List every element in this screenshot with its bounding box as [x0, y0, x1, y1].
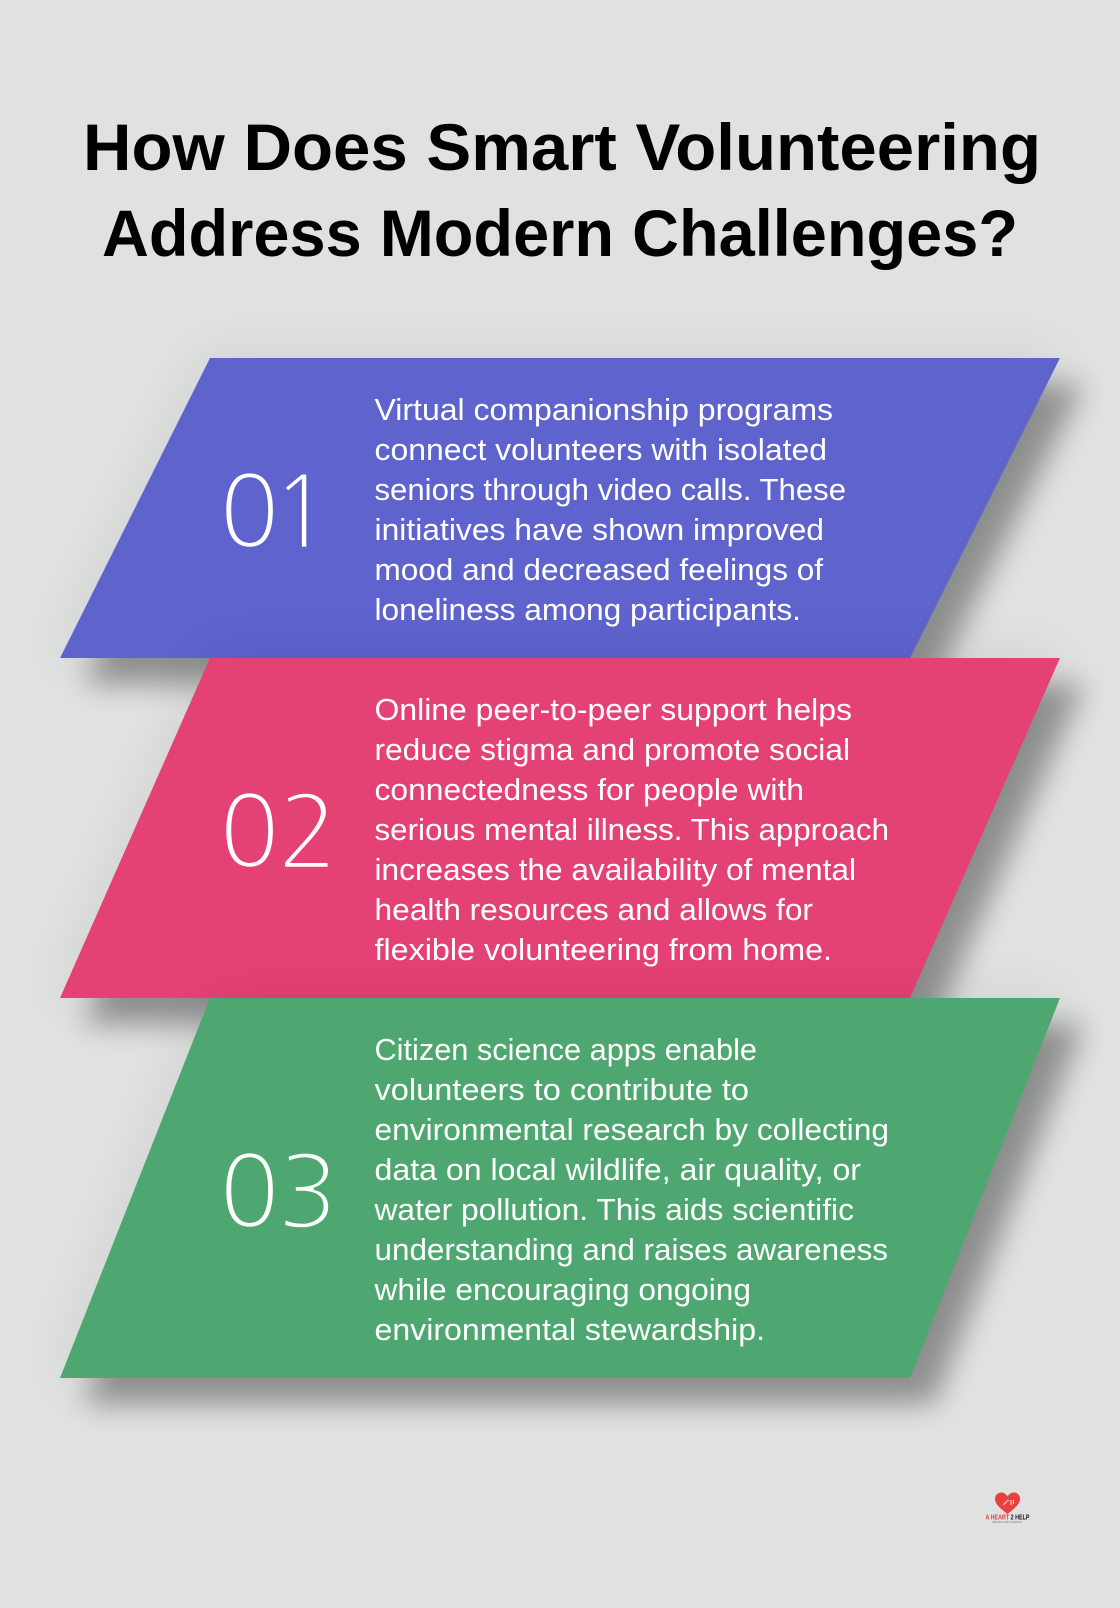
text: step 01 description	[374, 392, 846, 627]
text: step 03 description: volunteers to contribute to	[374, 1072, 749, 1107]
text: step 02 description	[374, 692, 889, 967]
text: step 01 description: initiatives have shown improved	[374, 512, 824, 547]
text: step 02 description: flexible volunteering from home.	[374, 932, 832, 967]
text: step 01 description: mood and decreased feelings of	[374, 552, 823, 587]
text: step 03 description	[373, 1032, 889, 1347]
text: step 03 description: while encouraging ongoing	[373, 1272, 751, 1307]
number 01: 01	[219, 462, 331, 562]
text: step 02 description: increases the availability of mental	[374, 852, 856, 887]
text: step 02 description: connectedness for people with	[374, 772, 804, 807]
text: step 02 description: Online peer-to-peer support helps	[374, 692, 852, 727]
number 02: 02	[219, 782, 338, 882]
number 03: 03	[219, 1142, 338, 1242]
panel: step 01	[60, 358, 1060, 658]
text: step 01 description: connect volunteers with isolated	[374, 432, 827, 467]
text: step 02 description: reduce stigma and promote social	[374, 732, 850, 767]
icon: heart with hands	[995, 1492, 1020, 1514]
text: step 01 description: loneliness among participants.	[374, 592, 801, 627]
text: step 03 description: environmental stewardship.	[374, 1312, 765, 1347]
blue parallelogram	[60, 358, 1060, 658]
text: step 03 description: water pollution. This aids scientific	[373, 1192, 854, 1227]
logo tagline: HELPING AND SHARING	[992, 1520, 1022, 1524]
logo: A Heart 2 Help	[986, 1492, 1030, 1524]
text: step 03 description: environmental research by collecting	[374, 1112, 889, 1147]
text: step 03 description: Citizen science apps enable	[374, 1032, 757, 1067]
panel: step 03	[60, 998, 1060, 1378]
text: step 01 description: seniors through video calls. These	[374, 472, 846, 507]
green parallelogram	[60, 998, 1060, 1378]
text: step 03 description: understanding and raises awareness	[374, 1232, 888, 1267]
title: Address Modern Challenges?	[102, 196, 1018, 270]
pink parallelogram	[60, 658, 1060, 998]
text: step 02 description: health resources and allows for	[374, 892, 813, 927]
text: step 03 description: data on local wildlife, air quality, or	[374, 1152, 861, 1187]
panel: step 02	[60, 658, 1060, 998]
text: step 02 description: serious mental illness. This approach	[374, 812, 889, 847]
text: step 01 description: Virtual companionship programs	[374, 392, 833, 427]
logo wordmark: A HEART 2 HELP	[986, 1514, 1030, 1522]
title: How Does Smart Volunteering	[83, 110, 1041, 184]
title	[83, 110, 1041, 270]
